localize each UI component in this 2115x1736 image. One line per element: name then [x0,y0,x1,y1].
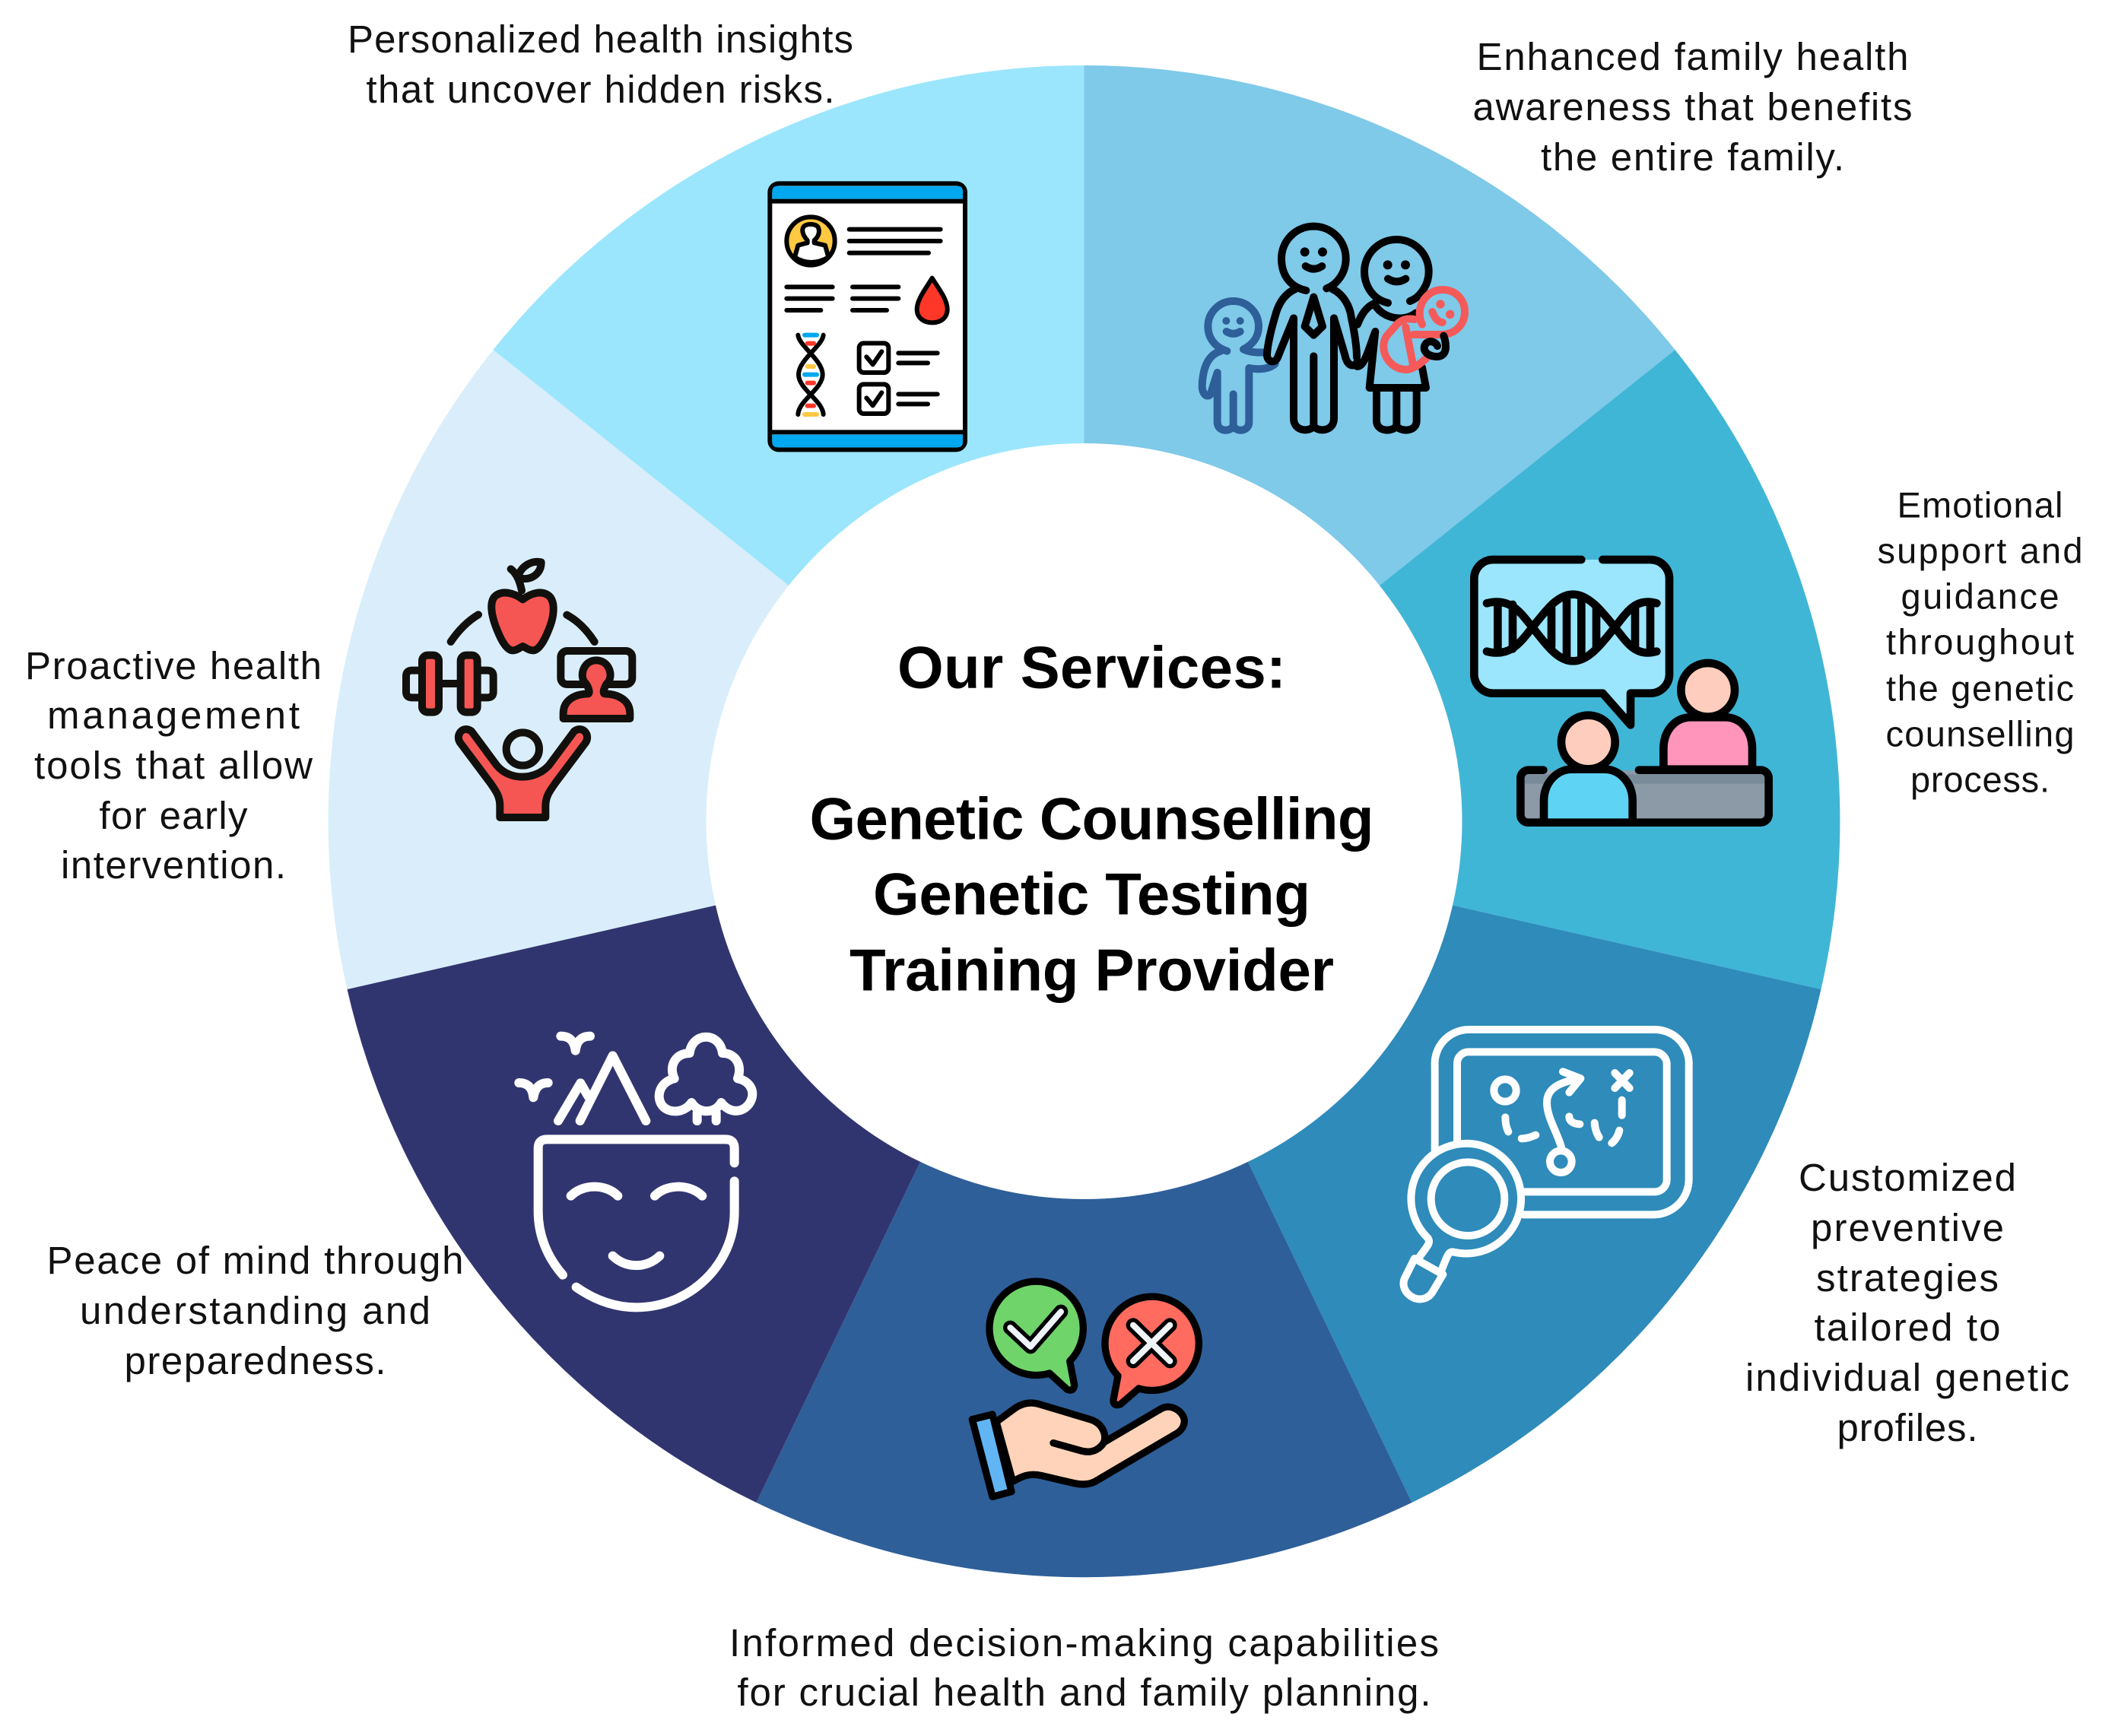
icon: hand with choices [972,1281,1199,1496]
text: informed decisions: for crucial health and family planning. [738,1671,1431,1714]
text: emotional support: Emotional [1897,485,2063,525]
father figure [1267,227,1358,430]
icon: calm mind [519,1036,752,1307]
icon: DNA counselling [1474,560,1769,823]
text: family awareness [1472,35,1912,179]
mother figure [1357,240,1429,430]
text: preventive strategies: individual genetic [1745,1356,2069,1399]
text: emotional support: process. [1910,759,2050,800]
center title: Genetic Testing [873,861,1310,928]
segment: family awareness [1084,65,1675,821]
segment: emotional support [1084,350,1840,989]
text: personalized insights [348,17,853,111]
text: personalized insights: that uncover hidden risks. [367,68,835,111]
icon: healthy lifestyle [406,562,632,817]
segment: informed decisions [756,821,1412,1577]
text: proactive management: Proactive health [25,644,322,687]
icon: family [1202,227,1465,430]
text: preventive strategies: strategies [1816,1256,1999,1300]
center circle [706,443,1462,1199]
text: proactive management: tools that allow [34,744,313,787]
text: emotional support: counselling [1886,713,2075,754]
text: emotional support [1877,485,2082,800]
donut chart [329,65,1840,1577]
text: proactive management: management [47,693,300,737]
icon: strategy board [1404,1030,1689,1299]
text: family awareness: Enhanced family health [1477,35,1909,78]
text: emotional support: guidance [1901,576,2059,616]
center title: Genetic Counselling [809,785,1373,852]
text: proactive management: for early [99,794,248,837]
text: emotional support: support and [1877,531,2082,570]
text: emotional support: throughout [1886,622,2074,662]
text: family awareness: the entire family. [1541,135,1844,179]
segment: personalized insights [493,65,1084,821]
text: peace of mind: Peace of mind through [47,1239,464,1282]
text: preventive strategies [1745,1156,2069,1449]
text: peace of mind [47,1239,464,1382]
text: proactive management: intervention. [61,843,286,887]
segment: proactive management [329,350,1084,989]
text: preventive strategies: preventive [1811,1206,2004,1249]
text: informed decisions: Informed decision-making capabilities [729,1621,1439,1665]
text: emotional support: the genetic [1886,668,2074,709]
segment: peace of mind [347,821,1084,1503]
baby figure [1383,290,1465,370]
child figure [1202,301,1275,430]
center title [809,634,1373,1004]
center title: Our Services: [897,634,1286,701]
text: peace of mind: preparedness. [125,1339,386,1382]
text: preventive strategies: Customized [1799,1156,2016,1199]
center title: Training Provider [849,937,1334,1004]
segment: preventive strategies [1084,821,1821,1503]
text: family awareness: awareness that benefits [1472,85,1912,129]
text: preventive strategies: profiles. [1837,1406,1977,1449]
text: preventive strategies: tailored to [1815,1306,2000,1349]
text: informed decisions [729,1621,1439,1714]
icon: health report [770,183,965,449]
text: personalized insights: Personalized health insights [348,17,853,61]
text: peace of mind: understanding and [80,1289,430,1332]
text: proactive management [25,644,322,887]
